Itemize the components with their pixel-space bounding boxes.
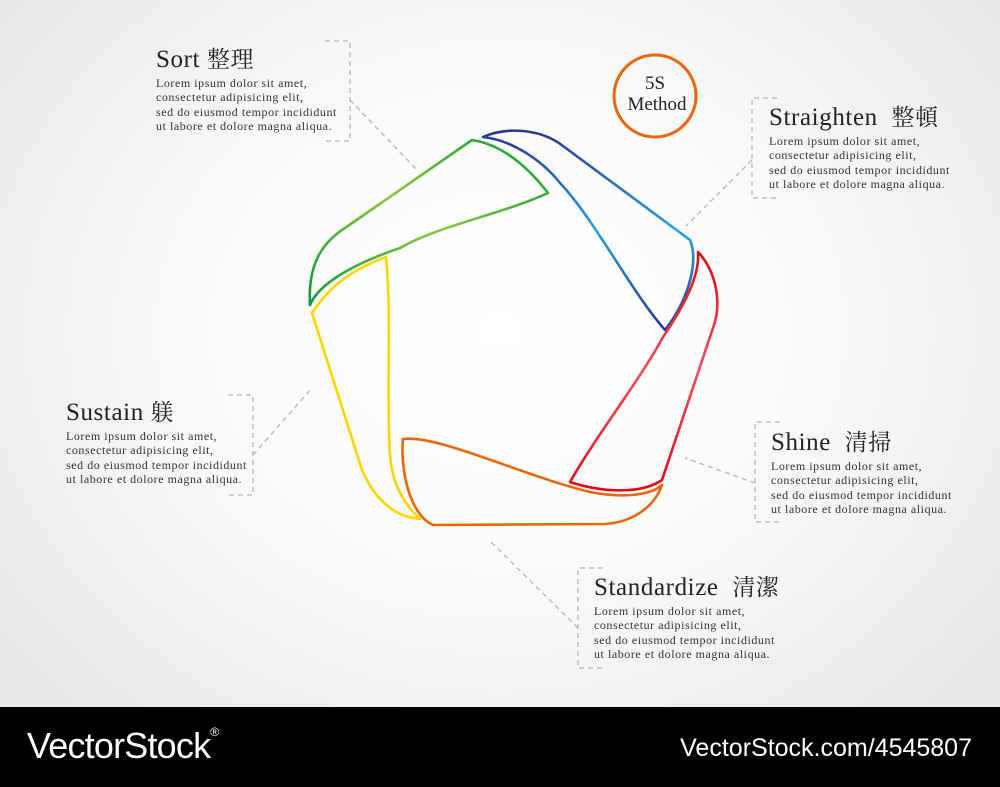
text block: Sort: sed do eiusmod tempor incididunt <box>156 105 337 119</box>
text block: Straighten: sed do eiusmod tempor incididunt <box>769 163 950 177</box>
text block: Sustain: ut labore et dolore magna aliqua. <box>66 472 242 486</box>
badge: 5S Method: Method <box>627 94 687 115</box>
footer <box>0 707 1000 787</box>
text block: Standardize: Lorem ipsum dolor sit amet, <box>594 604 745 618</box>
text block: Straighten: ut labore et dolore magna aliqua. <box>769 177 945 191</box>
text block: Sustain: Lorem ipsum dolor sit amet, <box>66 429 217 443</box>
footer url: VectorStock.com/4545807 <box>680 734 972 762</box>
badge: 5S Method <box>614 55 696 137</box>
footer logo: VectorStock® <box>27 725 218 766</box>
text block: Shine: Shine 清掃 <box>771 424 892 457</box>
text block: Sort: Lorem ipsum dolor sit amet, <box>156 76 307 90</box>
text block: Sort: consectetur adipisicing elit, <box>156 90 304 104</box>
text block: Sort: ut labore et dolore magna aliqua. <box>156 119 332 133</box>
badge: 5S Method: 5S <box>645 73 665 94</box>
shape: red <box>570 252 717 490</box>
text block: Sustain: sed do eiusmod tempor incididunt <box>66 458 247 472</box>
text block: Standardize <box>594 569 780 661</box>
text block: Straighten: consectetur adipisicing elit, <box>769 148 917 162</box>
shape: green <box>310 140 548 305</box>
text block: Shine: ut labore et dolore magna aliqua. <box>771 502 947 516</box>
text block: Standardize: Standardize 清潔 <box>594 569 780 602</box>
shape: orange <box>402 439 662 525</box>
text block: Sustain <box>66 394 247 486</box>
text block: Shine <box>771 424 952 516</box>
text block: Straighten: Lorem ipsum dolor sit amet, <box>769 134 920 148</box>
text block: Shine: consectetur adipisicing elit, <box>771 473 919 487</box>
text block: Standardize: consectetur adipisicing elit, <box>594 618 742 632</box>
connectors and brackets <box>228 41 780 668</box>
text block: Sort: Sort 整理 <box>156 41 254 74</box>
text block: Shine: sed do eiusmod tempor incididunt <box>771 488 952 502</box>
shape: yellow <box>312 257 420 519</box>
text block: Sustain: Sustain 躾 <box>66 394 174 427</box>
text block: Straighten: Straighten 整頓 <box>769 99 939 132</box>
text block: Shine: Lorem ipsum dolor sit amet, <box>771 459 922 473</box>
text block: Standardize: ut labore et dolore magna aliqua. <box>594 647 770 661</box>
text block: Sort <box>156 41 337 133</box>
text block: Sustain: consectetur adipisicing elit, <box>66 443 214 457</box>
text block: Standardize: sed do eiusmod tempor incididunt <box>594 633 775 647</box>
text block: Straighten <box>769 99 950 191</box>
shape: blue <box>483 131 693 330</box>
